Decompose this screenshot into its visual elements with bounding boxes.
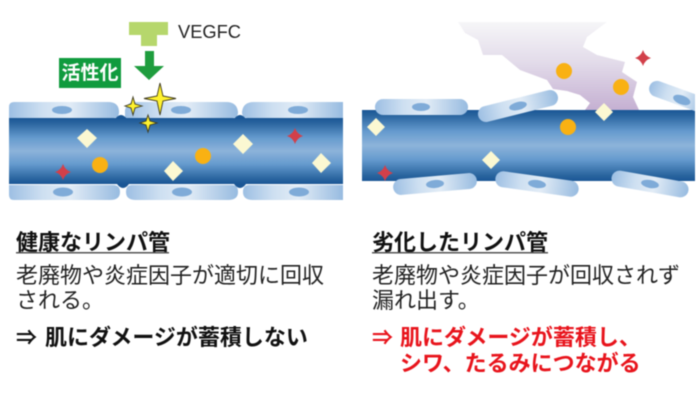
body text: damaged vessel: 老廃物や炎症因子が回収されず [372,263,680,288]
body text: damaged vessel: 漏れ出す。 [372,288,480,313]
text block: healthy vessel [16,230,324,350]
lymph vessel tube [362,110,695,181]
body text: healthy vessel: される。 [16,288,104,313]
vegfc label: VEGFC [178,21,241,42]
result: healthy vessel: ⇒ [16,327,37,350]
waste particles [367,50,651,181]
waste particles [55,128,331,181]
activation badge: 活性化 [61,62,119,84]
body text: healthy vessel: 老廃物や炎症因子が適切に回収 [16,263,324,288]
result: damaged vessel: 肌にダメージが蓄積し、 [400,325,641,350]
result: damaged vessel: ⇒ [372,327,393,350]
leak cloud [458,22,639,110]
bottom endothelial cells [9,185,343,200]
text block: damaged vessel [372,230,680,376]
heading: healthy vessel: 健康なリンパ管 [16,230,170,255]
displaced endothelial cells [375,79,700,199]
lymph vessel tube [9,115,343,188]
panel: healthy lymph vessel diagram [9,21,343,200]
result: healthy vessel: 肌にダメージが蓄積しない [45,325,308,350]
result: damaged vessel: シワ、たるみにつながる [400,351,641,376]
vegfc ligand icon [129,22,168,46]
top endothelial cells [9,102,343,118]
arrow: activation [134,51,164,80]
heading: damaged vessel: 劣化したリンパ管 [372,230,548,255]
panel: damaged lymph vessel diagram [362,22,700,199]
activation badge [59,58,121,88]
sparkles [125,83,176,132]
